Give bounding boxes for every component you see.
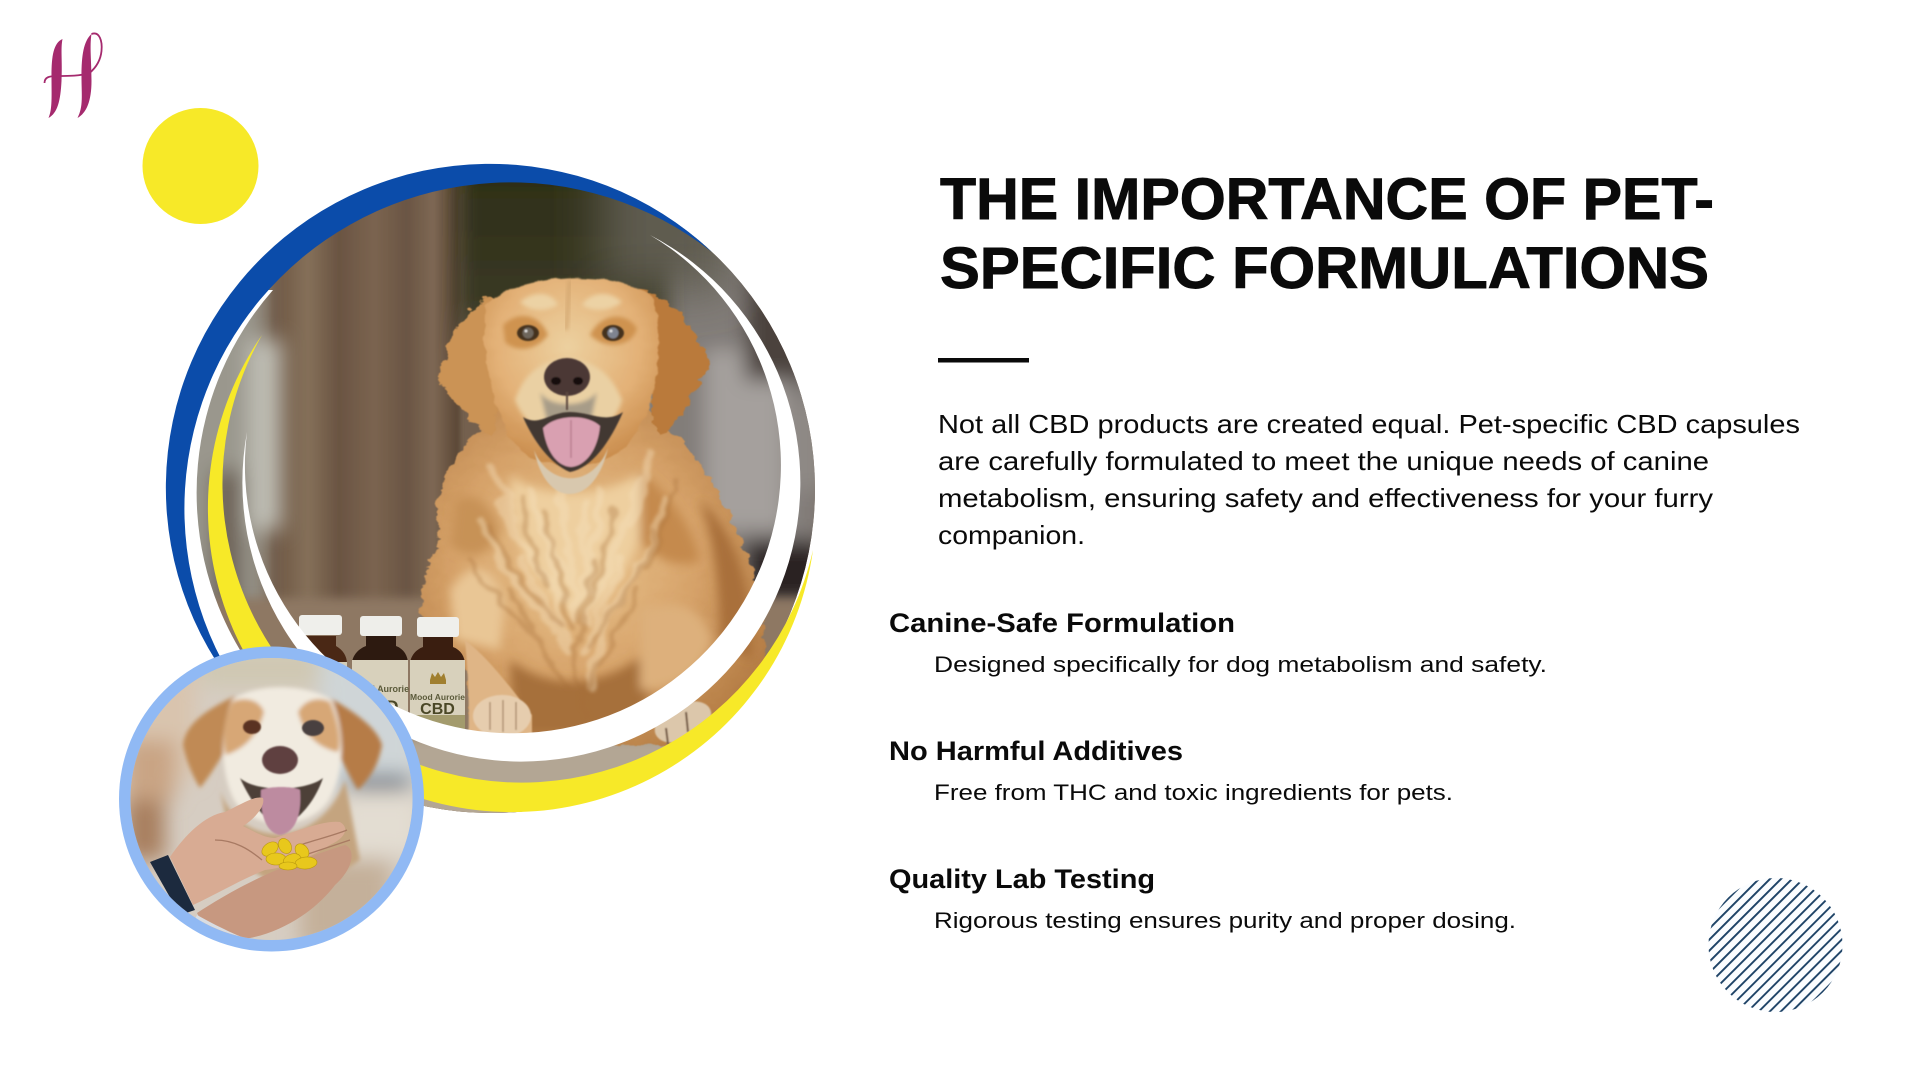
item: canine-safe formulation: Canine-Safe Formulation xyxy=(889,608,1235,638)
decorative striped circle xyxy=(1708,878,1842,1012)
small dog: head xyxy=(223,687,342,824)
golden retriever xyxy=(421,278,766,751)
dog: body xyxy=(421,400,766,745)
item: no harmful additives xyxy=(889,736,1453,805)
dog: muzzle and brow shading xyxy=(502,292,638,421)
small photo: finger lines xyxy=(215,830,350,860)
dog: forehead crease xyxy=(566,280,570,330)
bottles xyxy=(295,615,465,737)
dog: haunch and shading xyxy=(450,468,752,735)
small photo: upper hand xyxy=(170,797,345,905)
item: canine-safe formulation xyxy=(889,608,1547,677)
blue crescent ring xyxy=(166,164,712,710)
dog: mouth and tongue xyxy=(523,412,623,472)
small photo: yellow capsules xyxy=(259,836,317,870)
small dog: eyes xyxy=(243,720,324,736)
small dog: mouth and tongue xyxy=(240,778,323,835)
title xyxy=(940,167,1714,301)
item: quality lab testing: Quality Lab Testing xyxy=(889,864,1155,894)
decorative yellow dot xyxy=(142,108,258,224)
small photo: watch xyxy=(150,855,195,915)
dog: eyes xyxy=(517,325,624,341)
dog: right ear xyxy=(636,288,708,436)
intro paragraph xyxy=(938,409,1800,550)
bottle 2 xyxy=(352,616,409,712)
intro paragraph: Not all CBD products are created equal. Pet-specific CBD capsules xyxy=(938,409,1800,439)
small photo: background xyxy=(130,658,412,940)
photo background: room xyxy=(196,182,815,813)
bottle 3: Mood Aurorie xyxy=(410,692,465,702)
bottle 1 xyxy=(299,615,347,666)
main circular photo: golden retriever with bottles xyxy=(196,182,815,813)
item: quality lab testing: Rigorous testing ensures purity and proper dosing. xyxy=(934,908,1516,933)
small photo: lower hand xyxy=(197,845,352,938)
title: THE IMPORTANCE OF PET- xyxy=(940,167,1714,232)
outer white crescent xyxy=(100,290,273,700)
divider rule xyxy=(938,358,1029,362)
photo background: foliage fade xyxy=(600,140,730,290)
bottle 2: Mood Aurorie xyxy=(351,684,409,694)
dog: second paw xyxy=(654,700,712,744)
dog: chin xyxy=(534,448,608,494)
small photo: sleeve xyxy=(185,915,250,960)
inner white crescent xyxy=(242,235,800,762)
small photo: frame xyxy=(119,646,424,952)
bottle 2: CBD xyxy=(362,697,398,716)
dog: fur strands dark xyxy=(470,480,675,715)
title: SPECIFIC FORMULATIONS xyxy=(940,236,1709,301)
intro paragraph: companion. xyxy=(938,520,1085,550)
bottle 3 xyxy=(410,617,465,735)
item: no harmful additives: No Harmful Additives xyxy=(889,736,1183,766)
logo: script H monogram xyxy=(44,33,102,118)
dog: nose xyxy=(544,358,590,410)
item: no harmful additives: Free from THC and toxic ingredients for pets. xyxy=(934,780,1453,805)
small dog: right ear xyxy=(325,698,382,790)
photo background: dark foliage xyxy=(447,182,681,330)
dog: front left paw xyxy=(465,642,533,734)
small circular photo: dog receiving capsules xyxy=(119,646,424,960)
intro paragraph: metabolism, ensuring safety and effectiveness for your furry xyxy=(938,483,1713,513)
item: quality lab testing xyxy=(889,864,1516,933)
small dog: nose xyxy=(262,746,298,774)
dog: head xyxy=(484,278,659,466)
item: canine-safe formulation: Designed specifically for dog metabolism and safety. xyxy=(934,652,1547,677)
intro paragraph: are carefully formulated to meet the unique needs of canine xyxy=(938,446,1709,476)
small photo: dog xyxy=(183,687,382,900)
small dog: left ear xyxy=(183,696,240,788)
bottle 3: CBD xyxy=(420,701,455,718)
dog: left ear xyxy=(437,295,496,425)
small dog: tan patches xyxy=(224,699,340,755)
dog: fur strands light xyxy=(480,450,665,690)
small dog: neck xyxy=(220,780,362,878)
yellow crescent ring xyxy=(208,335,813,812)
